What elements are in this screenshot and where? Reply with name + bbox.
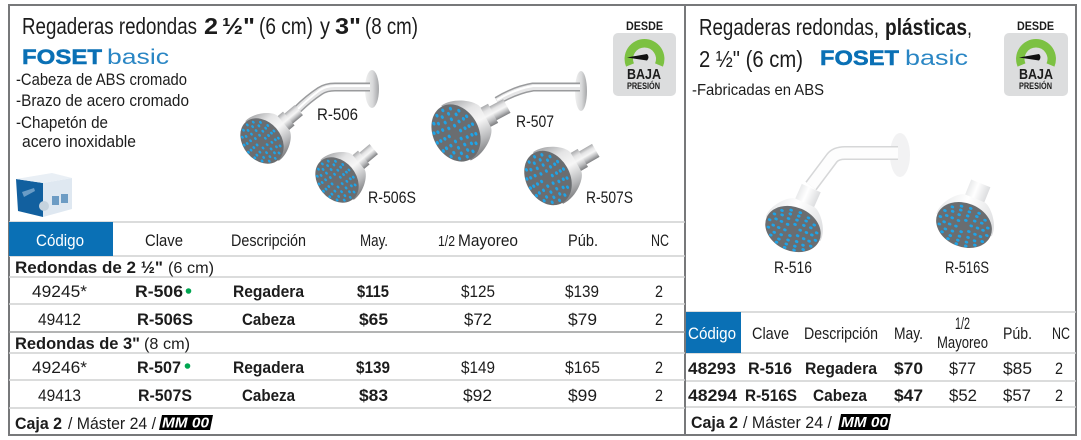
- row 49246: [32, 358, 663, 377]
- group heading: 2 1/2: (6 cm): [168, 260, 214, 277]
- price table: left: [9, 222, 685, 433]
- price table: right: [686, 312, 1076, 432]
- table header: [686, 312, 1070, 353]
- title: plásticas: [885, 14, 967, 40]
- title: ½": [222, 13, 255, 39]
- logo: FOSET basic: FOSET: [820, 47, 899, 70]
- table header: [9, 222, 669, 256]
- badge: baja presión: BAJA: [627, 66, 661, 83]
- row 48294: $57: [1003, 386, 1031, 405]
- row 48293: R-516: [748, 359, 792, 378]
- group heading: 3: Redondas de 3": [15, 334, 140, 353]
- feature list: -Cabeza de ABS cromado: [16, 70, 187, 89]
- table header: May.: [360, 231, 388, 250]
- row 48294: 48294: [688, 386, 738, 405]
- row 48294: $47: [894, 386, 923, 405]
- table rules: [686, 312, 1076, 407]
- row 49412: R-506S: [137, 310, 193, 329]
- row 49246: $165: [565, 358, 600, 377]
- row 49412: $72: [464, 310, 492, 329]
- row 49412: 2: [655, 310, 663, 329]
- row 48293: 48293: [688, 359, 736, 378]
- title: 2 ½" (6 cm): [699, 46, 803, 72]
- footer note: / Máster 24 /: [743, 413, 832, 432]
- product: R-516S: R-516S: [945, 258, 989, 277]
- footer note: MM 00: [841, 414, 889, 431]
- title: ,: [967, 14, 972, 40]
- badge: baja presión: PRESIÓN: [627, 80, 660, 92]
- product: R-506S: [306, 129, 416, 212]
- row 49246: 49246*: [32, 358, 87, 377]
- badge: baja presión: BAJA: [1019, 66, 1053, 83]
- product: R-516S: [928, 172, 1009, 277]
- table rules: [9, 222, 685, 408]
- product: R-516: R-516: [774, 258, 812, 277]
- row 48293: [688, 359, 1063, 378]
- icon: product box: [16, 173, 72, 217]
- table header: Mayoreo: [937, 333, 988, 352]
- logo: FOSET basic: basic: [905, 47, 968, 70]
- title: 3": [335, 13, 361, 39]
- group heading: 3: (8 cm): [144, 336, 190, 353]
- row 49245: 49245*: [32, 282, 87, 301]
- panel: regaderas plásticas: [686, 14, 1076, 432]
- table header: 1/2: [438, 233, 455, 250]
- row 48293: 2: [1055, 359, 1063, 378]
- product: R-506S: R-506S: [368, 188, 416, 207]
- footer note: MM 00: [162, 414, 210, 432]
- feature list: acero inoxidable: [22, 132, 136, 151]
- feature list: -Chapetón de: [16, 113, 108, 132]
- badge: baja presión: [613, 19, 676, 96]
- group heading: 2 1/2: Redondas de 2 ½": [15, 258, 163, 277]
- feature list: [16, 70, 189, 151]
- row 49413: R-507S: [138, 386, 192, 405]
- title: Regaderas redondas,: [699, 14, 879, 40]
- product: R-507S: R-507S: [586, 188, 633, 207]
- feature list: -Brazo de acero cromado: [16, 91, 189, 110]
- table header: Descripción: [231, 231, 306, 250]
- title: [22, 13, 418, 39]
- row 48294: R-516S: [745, 386, 797, 405]
- panel: regaderas cromadas: [9, 13, 685, 433]
- product: R-516: [757, 133, 910, 277]
- feature list: -Fabricadas en ABS: [692, 82, 824, 99]
- footer note: Caja 2: [691, 413, 738, 432]
- row 49413: 2: [655, 386, 663, 405]
- footer note: [15, 414, 213, 433]
- row 48293: $77: [949, 359, 976, 378]
- row 49246: $139: [356, 358, 390, 377]
- row 49246: R-507: [137, 358, 181, 377]
- row 49246: $149: [461, 358, 495, 377]
- table header: Mayoreo: [458, 231, 518, 250]
- table header: NC: [651, 231, 669, 250]
- row 48294: [688, 386, 1063, 405]
- table header: May.: [894, 324, 923, 343]
- row 49412: Cabeza: [242, 310, 295, 329]
- title: Regaderas redondas: [22, 13, 197, 39]
- logo: FOSET basic: [820, 47, 968, 70]
- row 48294: $52: [949, 386, 977, 405]
- logo: FOSET basic: basic: [107, 46, 169, 69]
- row 49413: $99: [568, 386, 597, 405]
- row 49412: [38, 310, 663, 329]
- row 49245: $115: [357, 282, 389, 301]
- row 49413: 49413: [38, 386, 81, 405]
- row 48293: Regadera: [805, 359, 878, 378]
- table header: NC: [1052, 324, 1070, 343]
- footer note: Caja 2: [15, 414, 62, 433]
- row 49412: $65: [359, 310, 388, 329]
- footer note: [691, 413, 891, 432]
- product: R-507: R-507: [516, 112, 554, 131]
- table header: Código: [688, 324, 736, 343]
- badge: baja presión: DESDE: [1017, 19, 1054, 33]
- badge: baja presión: PRESIÓN: [1019, 80, 1052, 92]
- row 49412: $79: [568, 310, 597, 329]
- row 49245: 2: [655, 282, 663, 301]
- title: (6 cm): [259, 13, 313, 39]
- product: R-507S: [514, 124, 633, 215]
- product: R-507: [421, 71, 587, 171]
- row 49412: 49412: [38, 310, 81, 329]
- title: (8 cm): [365, 13, 418, 39]
- badge: baja presión: DESDE: [626, 19, 663, 33]
- row 49245: $125: [461, 282, 495, 301]
- row 49246: Regadera: [233, 358, 304, 377]
- row 48294: Cabeza: [813, 386, 867, 405]
- title: y: [320, 13, 330, 39]
- product: R-506: [231, 70, 379, 173]
- row 48293: $85: [1003, 359, 1032, 378]
- badge: baja presión: [1004, 19, 1068, 96]
- title: [699, 14, 972, 72]
- table header: Código: [36, 231, 84, 250]
- row 49245: R-506: [135, 282, 183, 301]
- row 48293: $70: [894, 359, 923, 378]
- row 49413: $92: [463, 386, 492, 405]
- table header: Púb.: [1003, 324, 1032, 343]
- product: R-506: R-506: [317, 105, 358, 124]
- row 49413: [38, 386, 663, 405]
- table header: 1/2: [955, 314, 970, 333]
- row 49245: $139: [565, 282, 599, 301]
- row 49245: Regadera: [233, 282, 304, 301]
- logo: FOSET basic: FOSET: [22, 46, 102, 69]
- table header: Púb.: [568, 231, 598, 250]
- row 49245: [32, 282, 663, 301]
- table header: Clave: [145, 231, 183, 250]
- footer note: / Máster 24 /: [68, 414, 156, 433]
- row 48294: 2: [1055, 386, 1063, 405]
- row 49413: Cabeza: [242, 386, 295, 405]
- row 49246: 2: [655, 358, 663, 377]
- row 49413: $83: [359, 386, 388, 405]
- table header: Clave: [752, 324, 789, 343]
- title: 2: [204, 13, 218, 39]
- table header: Descripción: [804, 324, 878, 343]
- logo: FOSET basic: [22, 46, 169, 69]
